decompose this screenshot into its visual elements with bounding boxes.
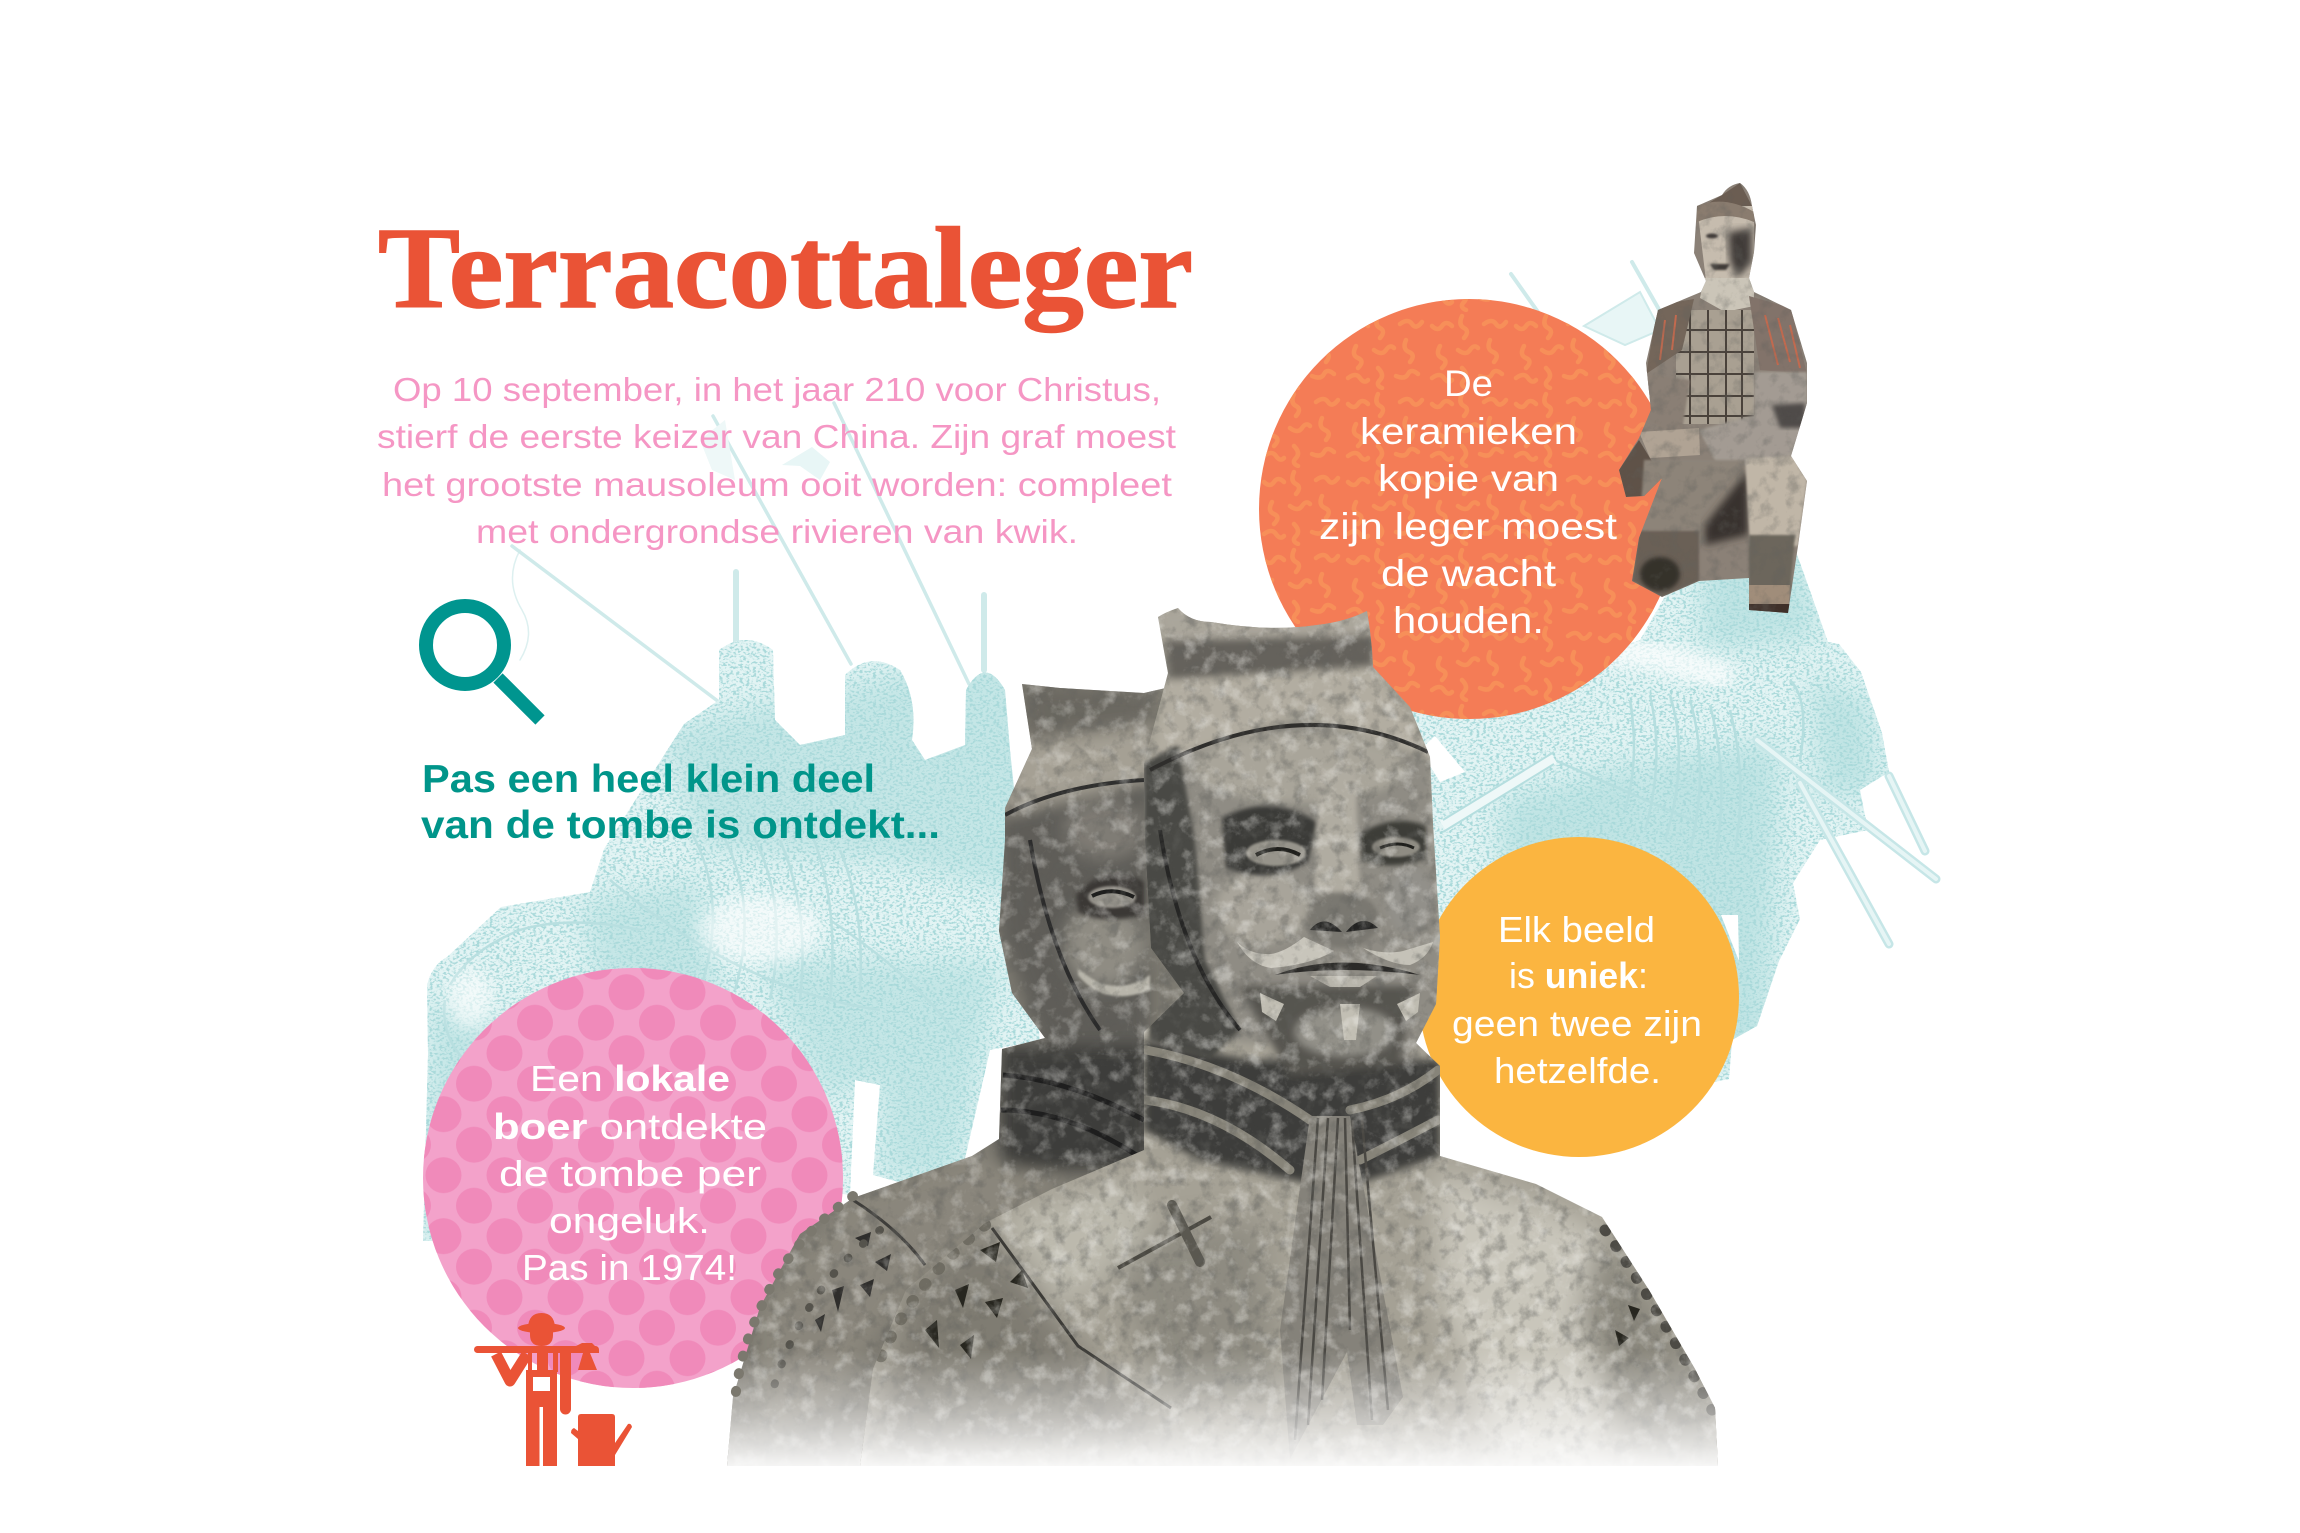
- yellow circle text: is uniek:: [1509, 955, 1648, 996]
- pink circle text: de tombe per: [499, 1153, 761, 1194]
- icon: farmer with bucket: [474, 1313, 632, 1466]
- yellow circle text: [1452, 909, 1702, 1091]
- panel: orange circle: [1259, 299, 1679, 719]
- photo: front terracotta warrior: [850, 600, 1730, 1470]
- teal callout text: van de tombe is ontdekt...: [421, 804, 940, 847]
- studs on back warrior's shoulder edge: [735, 1196, 853, 1400]
- pink circle text: Pas in 1974!: [522, 1247, 737, 1288]
- title: Terracottaleger: [378, 205, 1193, 332]
- yellow circle text: hetzelfde.: [1494, 1050, 1661, 1091]
- orange circle text: De: [1444, 363, 1493, 404]
- intro text: [377, 371, 1176, 550]
- pink circle text: [493, 1058, 767, 1288]
- icon: magnifying glass: [426, 606, 540, 720]
- lances right: [1757, 740, 1936, 944]
- pink circle text: boer ontdekte: [493, 1106, 767, 1147]
- yellow circle text: Elk beeld: [1498, 909, 1655, 950]
- orange circle text: keramieken: [1360, 411, 1577, 452]
- teal callout text: Pas een heel klein deel: [422, 758, 875, 801]
- panel: yellow circle: [1419, 837, 1739, 1157]
- yellow circle text: geen twee zijn: [1452, 1003, 1702, 1044]
- photo: small kneeling terracotta statue: [1619, 183, 1807, 613]
- panel: pink circle: [423, 968, 843, 1388]
- background engraving: right riders and horses: [1405, 262, 1936, 1090]
- orange circle text: zijn leger moest: [1319, 506, 1618, 547]
- intro text: stierf de eerste keizer van China. Zijn graf moest: [377, 418, 1176, 455]
- pink circle text: Een lokale: [530, 1058, 730, 1099]
- pink circle text: ongeluk.: [549, 1200, 710, 1241]
- orange circle text: houden.: [1393, 600, 1544, 641]
- orange circle text: de wacht: [1381, 553, 1557, 594]
- photo: back terracotta warrior: [727, 684, 1184, 1466]
- intro text: het grootste mausoleum ooit worden: compleet: [382, 466, 1172, 503]
- orange circle text: kopie van: [1378, 458, 1559, 499]
- teal callout text: [421, 758, 940, 847]
- background engraving: left riders and horses: [420, 403, 1060, 1250]
- orange circle text: [1319, 363, 1618, 641]
- intro text: Op 10 september, in het jaar 210 voor Christus,: [393, 371, 1161, 408]
- intro text: met ondergrondse rivieren van kwik.: [476, 513, 1078, 550]
